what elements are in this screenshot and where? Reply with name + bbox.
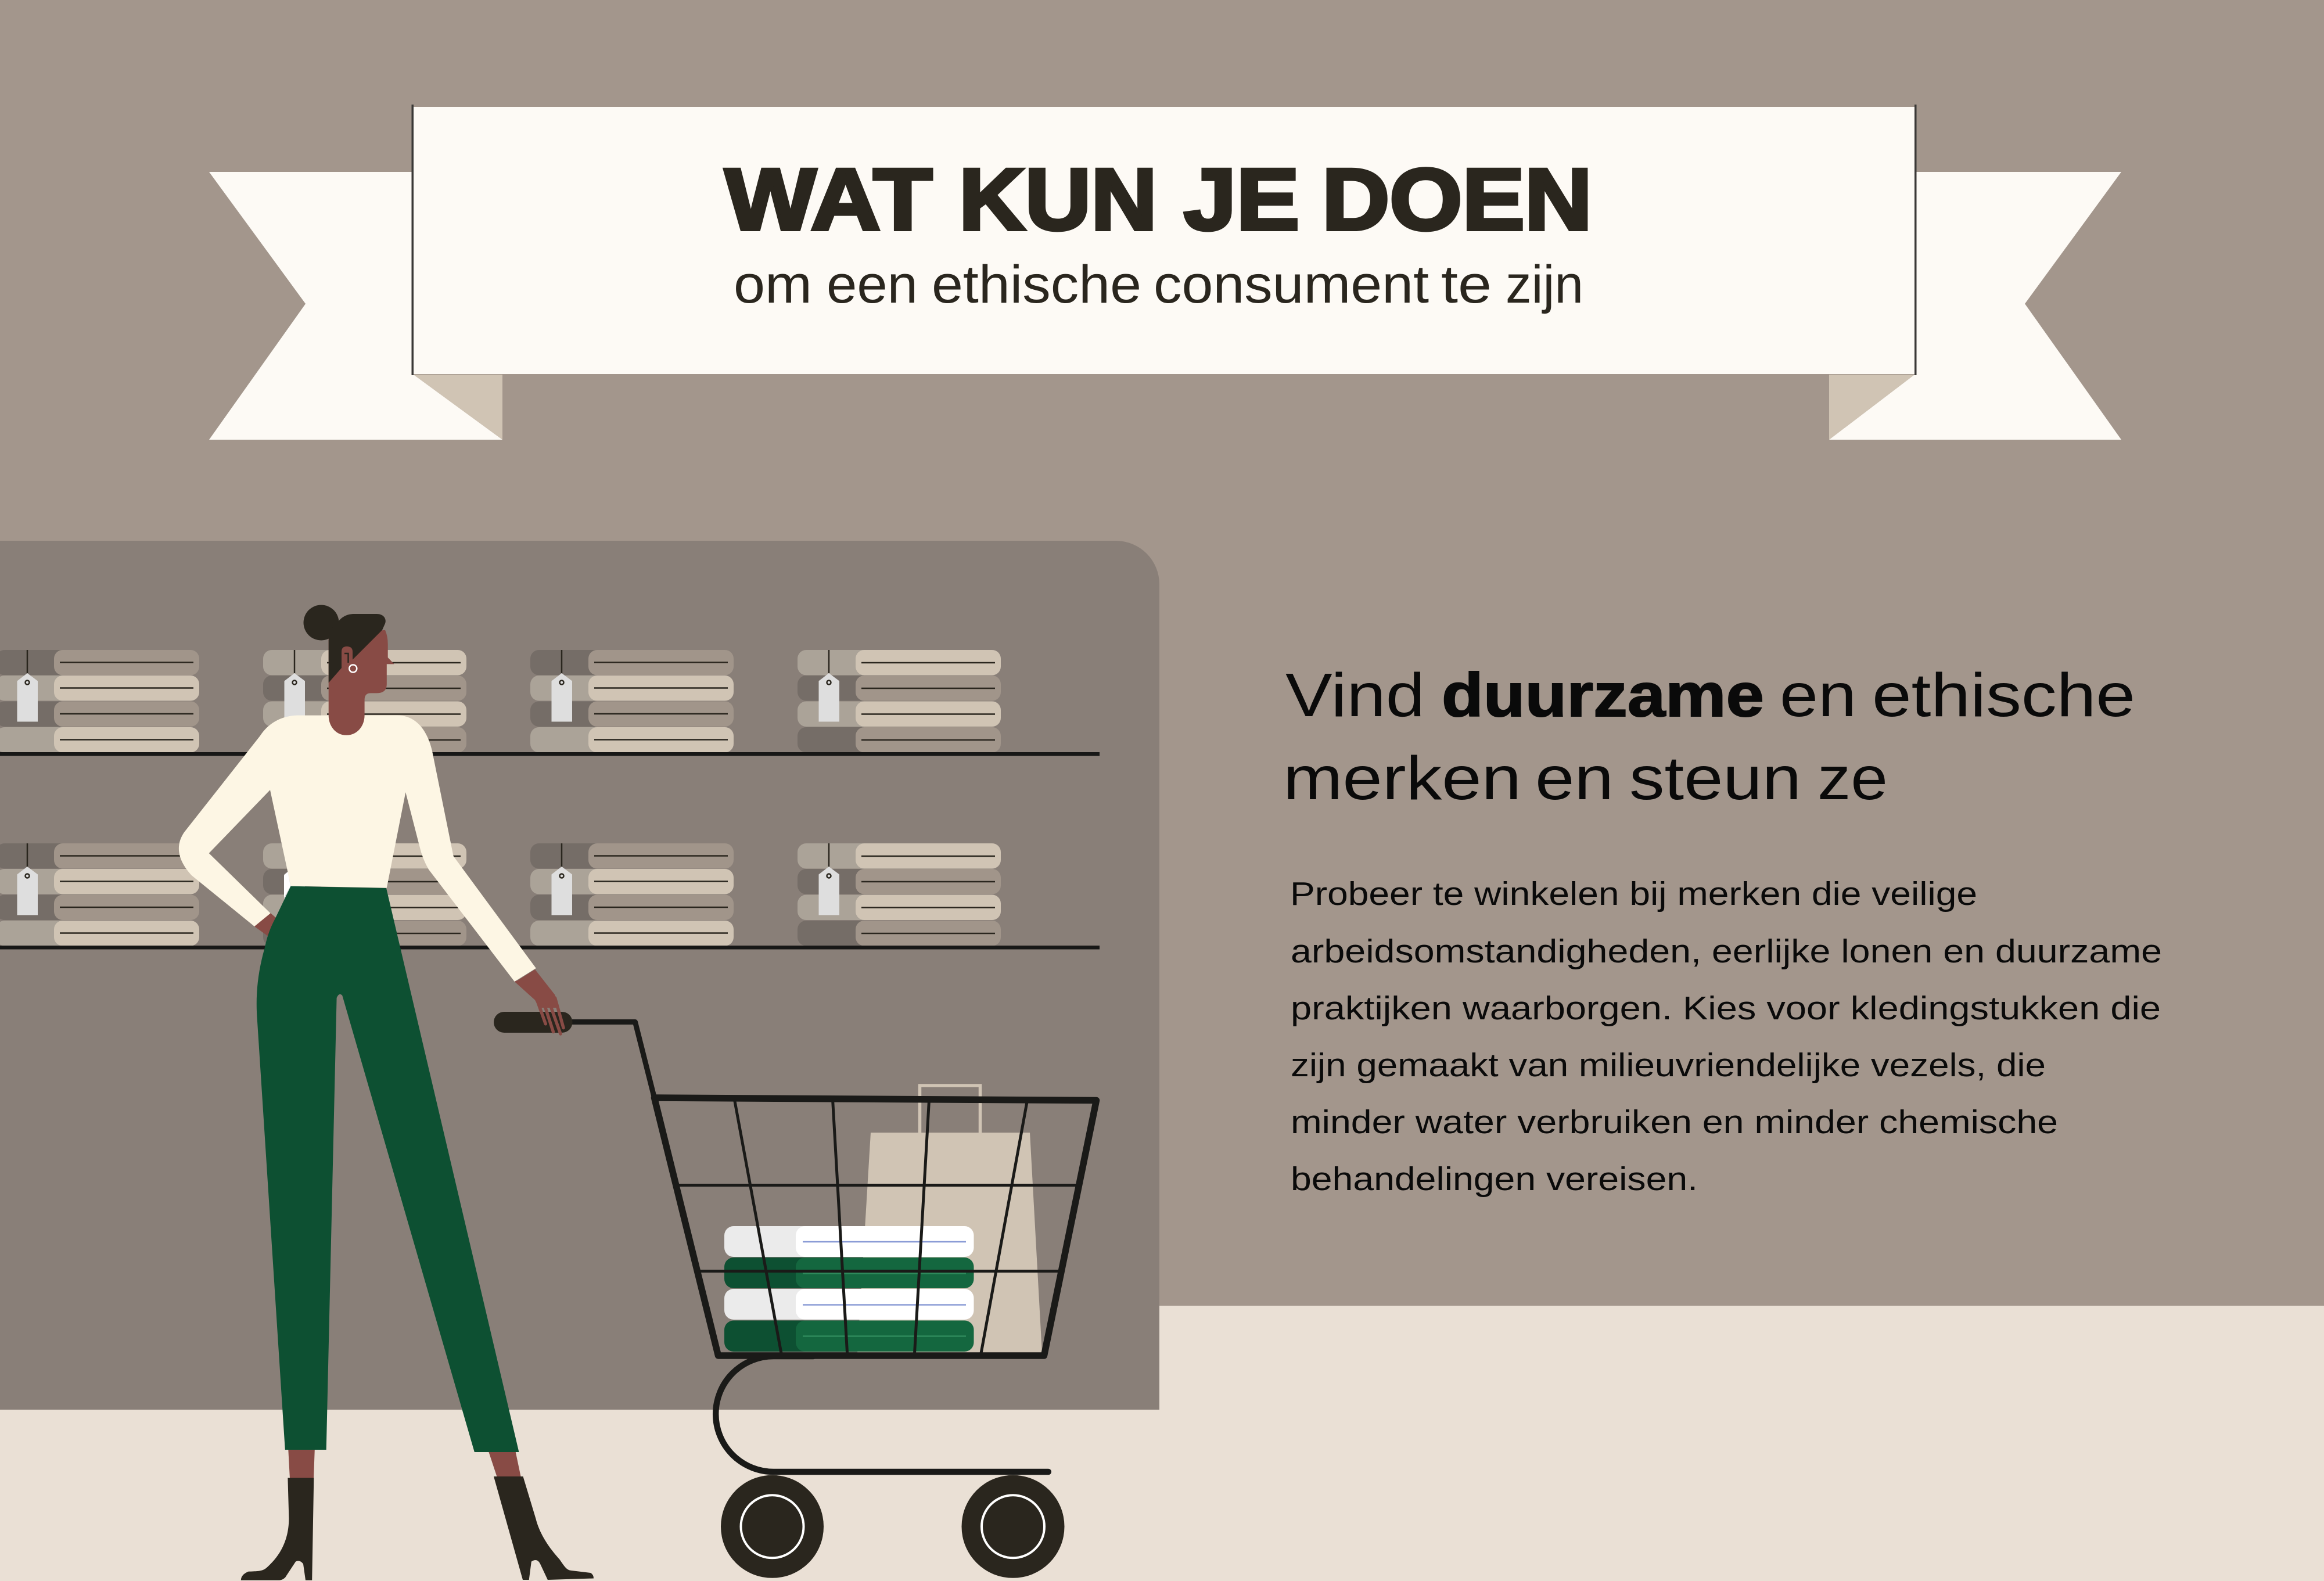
ribbon main band <box>412 107 1916 374</box>
folded clothes in cart <box>724 1226 974 1352</box>
stack 3 <box>530 843 734 946</box>
panel: store shelving wall <box>0 541 1159 1410</box>
body text: zijn gemaakt van milieuvriendelijke vezels, die <box>1291 1047 2046 1084</box>
hair <box>329 614 386 683</box>
ear line <box>344 653 349 663</box>
heading: ze <box>1817 744 1888 813</box>
cart wires <box>678 1101 1077 1353</box>
bun <box>303 605 339 640</box>
heading: en <box>1780 661 1856 730</box>
wheel left <box>721 1475 824 1578</box>
head and neck <box>329 630 394 735</box>
shopping cart <box>494 1012 1097 1578</box>
ribbon left fold <box>414 375 502 440</box>
title: DOEN <box>1322 150 1592 248</box>
stack 3 <box>530 650 734 753</box>
title: WAT <box>725 150 932 248</box>
earring <box>349 664 357 673</box>
stack 1 <box>0 843 199 946</box>
body text <box>1290 875 2162 1198</box>
shelf board <box>0 946 1100 949</box>
heading: Vind <box>1285 661 1425 730</box>
heading <box>1283 661 2135 813</box>
stack 2 <box>263 650 466 753</box>
subtitle <box>734 255 1583 314</box>
body text: minder water verbruiken en minder chemische <box>1291 1104 2058 1141</box>
body text: praktijken waarborgen. Kies voor kledingstukken die <box>1291 990 2161 1027</box>
heading: steun <box>1629 744 1801 813</box>
subtitle: een <box>827 255 918 314</box>
shelf board <box>0 752 1100 756</box>
ear <box>342 646 353 671</box>
subtitle: zijn <box>1506 255 1583 314</box>
title: KUN <box>959 150 1157 248</box>
ribbon right edge line <box>1914 105 1917 375</box>
floor <box>0 1306 2324 1581</box>
ribbon right tail <box>1829 172 2121 440</box>
trousers <box>257 886 519 1452</box>
stack 2 <box>263 843 466 946</box>
heading: duurzame <box>1442 661 1764 730</box>
right boot <box>494 1476 594 1580</box>
left hand <box>254 913 280 940</box>
legs skin <box>288 1446 521 1479</box>
left boot <box>241 1478 314 1580</box>
subtitle: om <box>734 255 812 314</box>
subtitle: te <box>1441 255 1492 314</box>
stack 4 <box>798 843 1001 946</box>
heading: merken <box>1283 744 1521 813</box>
sliver of price tag <box>284 872 290 897</box>
stack 1 <box>0 650 199 753</box>
cart lower tube <box>716 1356 1048 1472</box>
heading: ethische <box>1872 661 2135 730</box>
stack 4 <box>798 650 1001 753</box>
cart handle rod <box>572 1022 654 1098</box>
top shelf with clothing stacks <box>0 650 1100 756</box>
subtitle: ethische <box>932 255 1141 314</box>
subtitle: consument <box>1154 255 1429 314</box>
sweater <box>179 716 536 982</box>
heading: en <box>1535 744 1614 813</box>
bottom shelf with clothing stacks <box>0 843 1100 949</box>
right hand <box>515 969 563 1034</box>
shopping bag <box>857 1086 1042 1353</box>
wheel right <box>962 1475 1064 1578</box>
body text: Probeer te winkelen bij merken die veilige <box>1290 875 1977 912</box>
ribbon right fold <box>1829 375 1914 440</box>
title <box>725 150 1592 248</box>
woman <box>179 605 594 1580</box>
banner ribbon <box>209 105 2121 440</box>
body text: arbeidsomstandigheden, eerlijke lonen en duurzame <box>1291 933 2162 970</box>
title: JE <box>1184 150 1299 248</box>
ribbon left tail <box>209 172 502 440</box>
cart frame <box>654 1098 1097 1356</box>
cart handle grip <box>494 1012 573 1033</box>
ribbon left edge line <box>411 105 414 375</box>
body text: behandelingen vereisen. <box>1291 1160 1698 1198</box>
